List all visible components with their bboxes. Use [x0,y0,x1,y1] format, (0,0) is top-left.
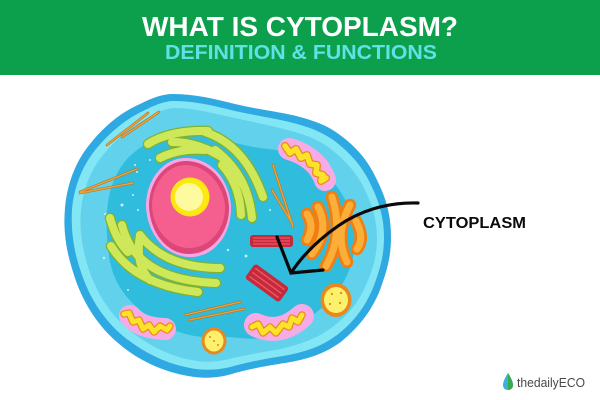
nucleolus [170,178,210,216]
mitochondrion bottom [252,315,302,333]
cell membrane [64,94,391,378]
arrow to cytoplasm [277,203,418,273]
nucleus [146,158,231,257]
title: WHAT IS CYTOPLASM? [142,11,458,42]
outer cytoplasm ring [72,101,384,370]
lower centriole [245,263,289,303]
cytoplasm label: CYTOPLASM [423,215,526,232]
mitochondrion upper right [285,146,326,181]
vesicle lower left [202,328,226,354]
mitochondrion lower left [124,313,170,332]
needle filaments [80,112,293,320]
brand name: thedailyECO [517,376,585,390]
upper centriole [250,235,293,247]
icon: leaf water drop [503,373,513,390]
header banner [0,0,600,75]
brand logo [503,373,585,390]
lower golgi apparatus [110,218,220,292]
upper golgi apparatus [148,131,263,218]
vesicle right [320,283,352,317]
orange golgi body [307,197,361,266]
animal cell diagram [64,94,391,378]
subtitle: DEFINITION & FUNCTIONS [165,42,437,64]
cytoplasm speckles [103,159,271,291]
inner cytoplasm [107,134,355,339]
cytoplasm [80,108,377,362]
